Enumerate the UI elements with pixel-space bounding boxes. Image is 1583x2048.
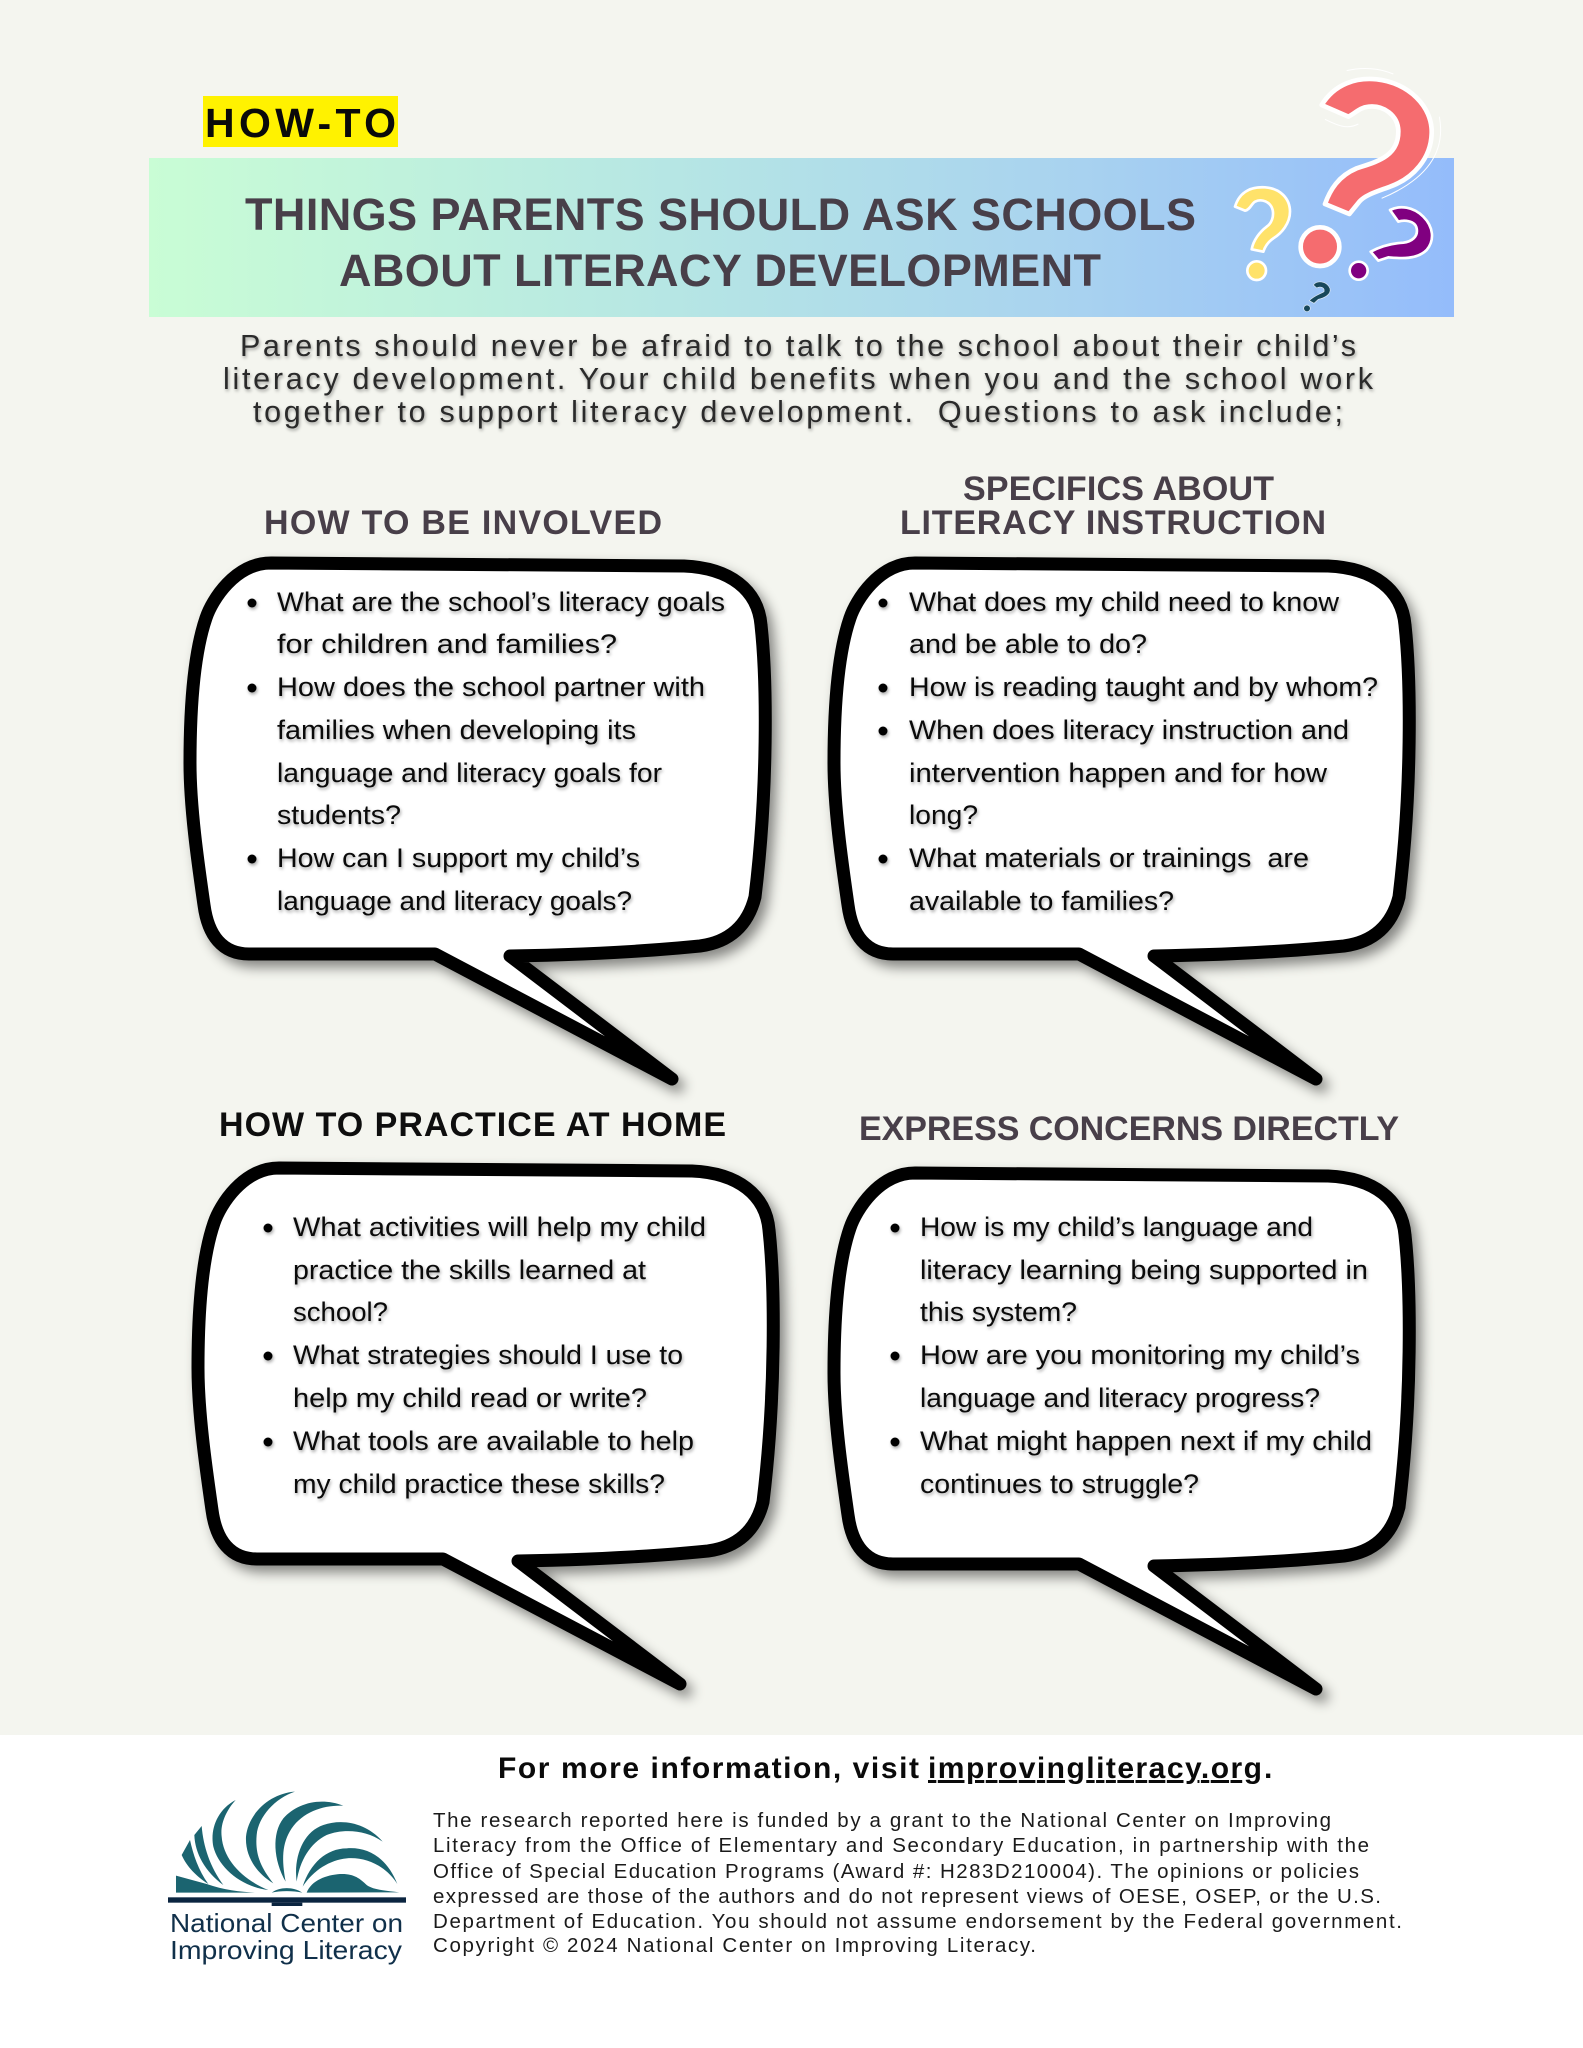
speech bubble shape — [834, 563, 1409, 1079]
questions list: What does my child need to know — [909, 587, 1340, 617]
questions list: How is reading taught and by whom? — [909, 672, 1378, 702]
questions list: What materials or trainings are — [909, 843, 1309, 873]
questions list: practice the skills learned at — [293, 1255, 647, 1285]
icon: open book — [168, 1792, 406, 1906]
panel: express concerns directly bubble — [834, 1173, 1409, 1689]
questions list: How is my child’s language and — [920, 1212, 1313, 1242]
questions list: What are the school’s literacy goals — [277, 587, 725, 617]
logo wordmark — [170, 1908, 403, 1965]
questions list: help my child read or write? — [293, 1383, 647, 1413]
questions list: language and literacy goals for — [277, 758, 662, 788]
questions list: my child practice these skills? — [293, 1469, 665, 1499]
intro paragraph: together to support literacy development. Questions to ask include; — [253, 395, 1343, 429]
questions list: When does literacy instruction and — [909, 715, 1349, 745]
questions list: How does the school partner with — [277, 672, 705, 702]
questions list: and be able to do? — [909, 629, 1147, 659]
questions list: school? — [293, 1297, 388, 1327]
questions list: long? — [909, 800, 978, 830]
heading: specifics about literacy instruction: LITERACY INSTRUCTION — [900, 504, 1326, 542]
funding disclaimer: Department of Education. You should not assume endorsement by the Federal government. — [433, 1910, 1402, 1933]
logo wordmark: Improving Literacy — [170, 1935, 402, 1965]
questions list: What might happen next if my child — [920, 1426, 1372, 1456]
panel: how to be involved bubble — [190, 563, 765, 1079]
intro paragraph: Parents should never be afraid to talk to the school about their child’s — [240, 329, 1356, 363]
intro paragraph: literacy development. Your child benefits when you and the school work — [223, 362, 1374, 396]
funding disclaimer — [433, 1809, 1402, 1957]
funding disclaimer: Literacy from the Office of Elementary and Secondary Education, in partnership with the — [433, 1834, 1369, 1857]
logo wordmark: National Center on — [170, 1908, 403, 1938]
logo: National Center on Improving Literacy — [168, 1792, 406, 1965]
more information line: For more information, visit — [498, 1752, 919, 1785]
questions list: How can I support my child’s — [277, 843, 640, 873]
heading: specifics about literacy instruction — [900, 470, 1326, 542]
funding disclaimer: Copyright © 2024 National Center on Improving Literacy. — [433, 1934, 1036, 1957]
speech bubble shape — [834, 1173, 1409, 1689]
questions list: families when developing its — [277, 715, 636, 745]
questions list: available to families? — [909, 886, 1174, 916]
questions list: students? — [277, 800, 401, 830]
speech bubble shape — [198, 1168, 773, 1684]
title banner: ABOUT LITERACY DEVELOPMENT — [339, 245, 1101, 296]
funding disclaimer: The research reported here is funded by a grant to the National Center on Improving — [433, 1809, 1331, 1832]
icon: question marks — [1235, 68, 1441, 312]
title banner: THINGS PARENTS SHOULD ASK SCHOOLS — [245, 189, 1196, 240]
title banner — [149, 158, 1454, 317]
questions list: continues to struggle? — [920, 1469, 1199, 1499]
questions list: What activities will help my child — [293, 1212, 706, 1242]
how-to tag: HOW-TO — [205, 100, 396, 146]
questions list: What strategies should I use to — [293, 1340, 683, 1370]
questions list — [264, 1212, 706, 1499]
questions list: intervention happen and for how — [909, 758, 1328, 788]
questions list: this system? — [920, 1297, 1077, 1327]
panel: how to practice at home bubble — [198, 1168, 773, 1684]
heading: how to be involved: HOW TO BE INVOLVED — [264, 504, 662, 542]
questions list: language and literacy goals? — [277, 886, 632, 916]
more information line: . — [1264, 1752, 1272, 1785]
questions list: literacy learning being supported in — [920, 1255, 1368, 1285]
heading: specifics about literacy instruction: SPECIFICS ABOUT — [963, 470, 1274, 508]
footer band — [0, 1735, 1583, 2048]
heading: express concerns directly: EXPRESS CONCERNS DIRECTLY — [859, 1110, 1399, 1148]
more information line: improvingliteracy.org — [928, 1752, 1262, 1785]
questions list — [878, 587, 1378, 916]
speech bubble shape — [190, 563, 765, 1079]
questions list — [248, 587, 725, 916]
questions list: language and literacy progress? — [920, 1383, 1320, 1413]
funding disclaimer: expressed are those of the authors and do not represent views of OESE, OSEP, or the U.S. — [433, 1885, 1381, 1908]
funding disclaimer: Office of Special Education Programs (Award #: H283D210004). The opinions or policies — [433, 1860, 1359, 1883]
questions list: How are you monitoring my child’s — [920, 1340, 1360, 1370]
questions list: What tools are available to help — [293, 1426, 694, 1456]
questions list — [890, 1212, 1372, 1499]
questions list: for children and families? — [277, 629, 617, 659]
panel: specifics about literacy instruction bubble — [834, 563, 1409, 1079]
heading: how to practice at home: HOW TO PRACTICE AT HOME — [219, 1106, 726, 1144]
more information line — [498, 1752, 1272, 1785]
intro paragraph — [223, 329, 1374, 429]
